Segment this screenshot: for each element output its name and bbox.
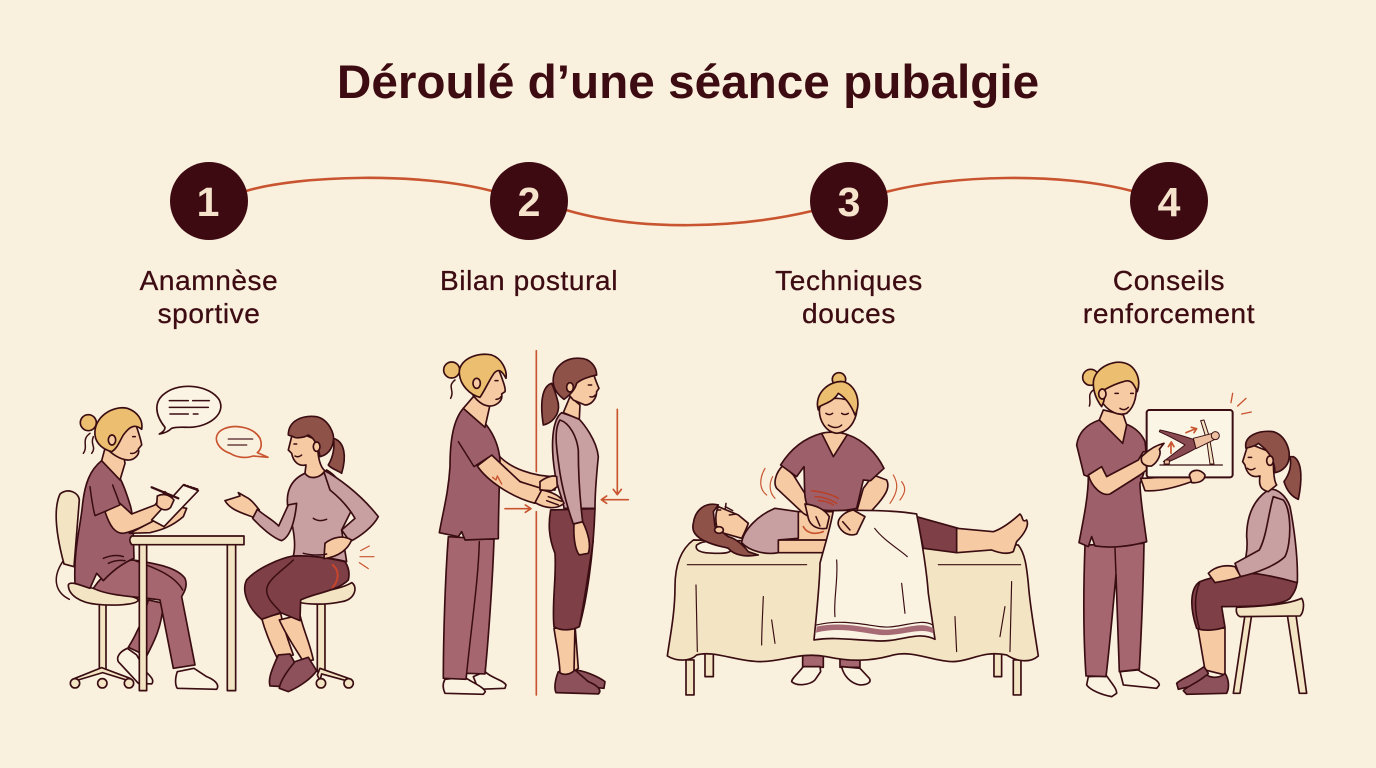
panel: techniques douces illustration [667,373,1038,695]
timeline connector curve [246,178,1132,225]
step 1 number badge: 1 [197,179,219,225]
step 3 label: Techniques [775,265,923,296]
step 1 label: sportive [158,298,260,329]
step 4 label: renforcement [1083,298,1255,329]
therapist standing [1077,410,1192,697]
step 3 label [775,265,923,329]
therapist head [1083,362,1139,414]
step 1 label [140,265,278,330]
therapist hands [803,504,865,535]
therapist head [80,408,142,460]
posture arrows [505,409,628,512]
patient head [542,358,599,425]
therapist hands [1141,443,1205,483]
massage table cloth [667,540,1038,662]
speech bubble therapist [157,386,221,434]
panel: bilan postural illustration [439,351,628,695]
notepad and pen [152,485,198,527]
step 4 number badge: 4 [1158,179,1181,225]
therapist standing [439,397,557,694]
step 1 number badge [170,162,248,240]
step 1 label: Anamnèse [140,265,278,296]
step 3 number badge [810,162,888,240]
step 3 number badge: 3 [838,179,860,225]
patient seated [1177,431,1301,694]
patient seated [225,470,378,692]
patient head [288,416,344,477]
therapist hands on patient [535,476,564,508]
therapist seated [75,448,218,689]
stool [1233,598,1307,693]
step 4 label [1083,265,1255,329]
step 2 number badge [490,162,568,240]
step 4 number badge [1130,162,1208,240]
therapist head [444,354,506,406]
step 4 label: Conseils [1113,265,1225,296]
panel: conseils renforcement illustration [1077,362,1307,697]
pillow [696,541,731,553]
therapist chair [56,491,138,688]
therapist feet behind table [792,653,870,685]
vertical posture reference line [534,351,539,695]
patient lying [693,503,1027,556]
panel: anamnèse illustration [56,386,378,692]
therapist torso and arms [761,432,905,530]
step 3 label: douces [802,298,896,329]
towel [814,510,935,641]
desk [130,536,244,691]
title: Déroulé d’une séance pubalgie [337,56,1039,109]
attention marks [1231,393,1251,414]
speech bubble patient [216,427,268,457]
patient standing [549,397,605,694]
patient stool [297,583,355,688]
step 2 number badge: 2 [518,179,540,225]
exercise poster [1147,410,1233,477]
therapist head [817,373,858,433]
step 2 label: Bilan postural [440,265,618,296]
massage table legs [686,653,1021,695]
